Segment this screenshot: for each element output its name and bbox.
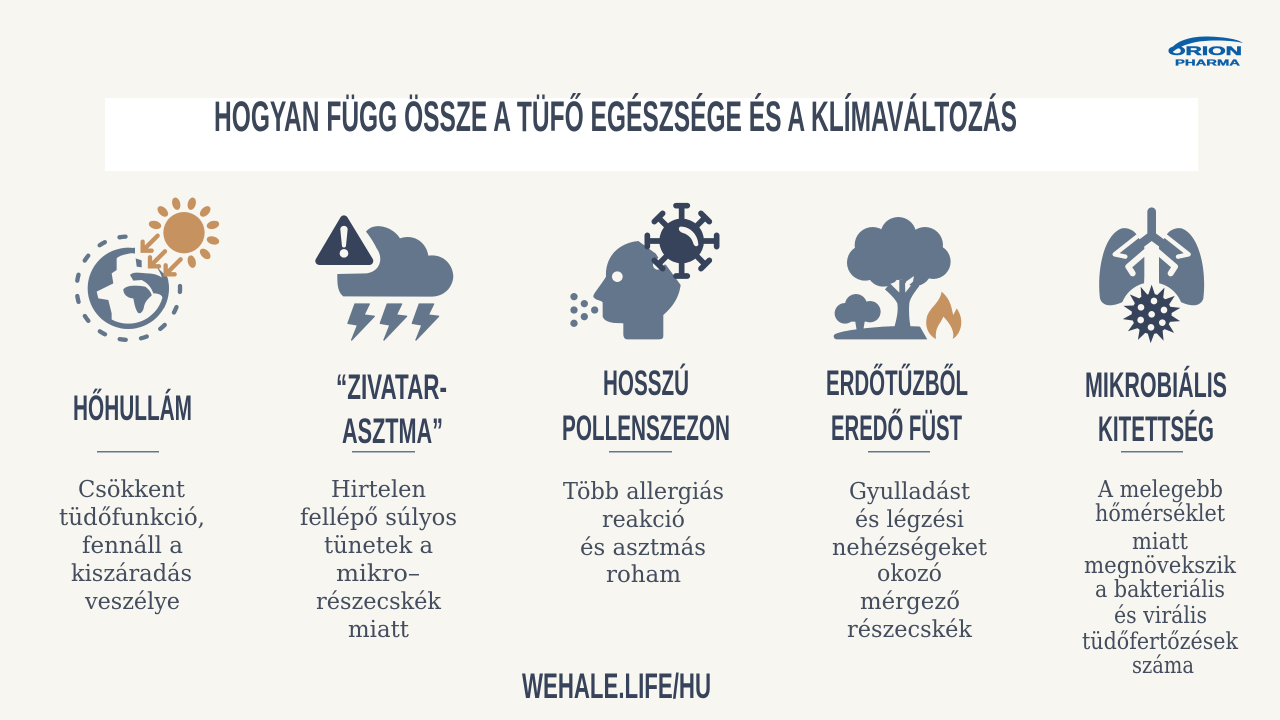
icon: tree and flame <box>834 217 961 339</box>
panel: thunderstorm asthma <box>300 219 457 643</box>
text: long pollen season description: Több allergiás <box>563 479 724 505</box>
text: heatwave description: tüdőfunkció, <box>59 505 205 531</box>
text: heatwave description: kiszáradás <box>71 561 192 587</box>
heading: thunderstorm asthma: “ZIVATAR- <box>336 368 447 407</box>
logo: Orion Pharma: ORION <box>1168 44 1242 58</box>
icon: globe <box>77 237 180 340</box>
text: heatwave description: Csökkent <box>78 477 186 503</box>
text: microbial exposure description: száma <box>1132 653 1194 679</box>
text: wildfire smoke description: és légzési <box>855 507 964 533</box>
text: heatwave description: fennáll a <box>82 533 183 559</box>
text: thunderstorm asthma description: részecskék <box>316 589 442 615</box>
text: microbial exposure description: és virális <box>1114 603 1207 629</box>
text: thunderstorm asthma description: fellépő súlyos <box>300 505 457 531</box>
footer link: WEHALE.LIFE/HU <box>522 667 711 706</box>
text: microbial exposure description: tüdőfertőzések <box>1082 629 1239 655</box>
text: microbial exposure description: A melegebb <box>1097 477 1223 503</box>
text: wildfire smoke description: Gyulladást <box>849 479 971 505</box>
text: thunderstorm asthma description: miatt <box>348 617 410 643</box>
title band <box>105 98 1198 171</box>
text: microbial exposure description: a bakteriális <box>1095 577 1225 603</box>
text: thunderstorm asthma description: Hirtelen <box>331 477 426 503</box>
text: microbial exposure description: megnövekszik <box>1084 553 1237 579</box>
heading: wildfire smoke <box>826 363 968 448</box>
text: wildfire smoke description: nehézségeket <box>832 535 988 561</box>
text: wildfire smoke description: mérgező <box>860 589 960 615</box>
text: thunderstorm asthma description <box>300 477 457 643</box>
logo: Orion Pharma: PHARMA <box>1175 58 1240 68</box>
text: long pollen season description: és asztmás <box>580 535 706 561</box>
icon: storm cloud with warning <box>319 219 453 340</box>
heading: wildfire smoke: ERDŐTŰZBŐL <box>826 363 968 403</box>
text: heatwave description <box>59 477 205 615</box>
text: microbial exposure description <box>1082 477 1239 679</box>
text: long pollen season description: roham <box>606 562 681 588</box>
panel: wildfire smoke <box>826 217 988 643</box>
text: long pollen season description: reakció <box>602 507 685 533</box>
logo: Orion Pharma <box>1168 36 1243 68</box>
heading: thunderstorm asthma: ASZTMA” <box>342 412 443 451</box>
text: microbial exposure description: miatt <box>1132 529 1189 555</box>
heading: microbial exposure <box>1085 365 1227 449</box>
text: wildfire smoke description: részecskék <box>847 617 973 643</box>
heading: heatwave: HŐHULLÁM <box>73 388 192 428</box>
text: wildfire smoke description <box>832 479 988 643</box>
panel: microbial exposure <box>1082 212 1239 679</box>
text: thunderstorm asthma description: tünetek a <box>324 533 433 559</box>
panel: long pollen season <box>562 206 730 588</box>
text: microbial exposure description: hőmérséklet <box>1095 501 1226 527</box>
heading: long pollen season <box>562 363 730 448</box>
text: long pollen season description <box>563 479 724 588</box>
heading: thunderstorm asthma <box>336 368 447 451</box>
icon: sun and arrows <box>143 197 220 274</box>
icon: head with pollen <box>570 206 717 339</box>
text: thunderstorm asthma description: mikro– <box>336 561 420 587</box>
text: heatwave description: veszélye <box>84 589 180 615</box>
heading: long pollen season: POLLENSZEZON <box>562 409 730 448</box>
heading: wildfire smoke: EREDŐ FÜST <box>831 408 962 448</box>
icon: lungs <box>1099 212 1204 305</box>
panel: heatwave <box>59 197 220 615</box>
icon: microbe <box>1120 282 1183 346</box>
heading: long pollen season: HOSSZÚ <box>603 363 689 403</box>
text: wildfire smoke description: okozó <box>877 561 942 587</box>
